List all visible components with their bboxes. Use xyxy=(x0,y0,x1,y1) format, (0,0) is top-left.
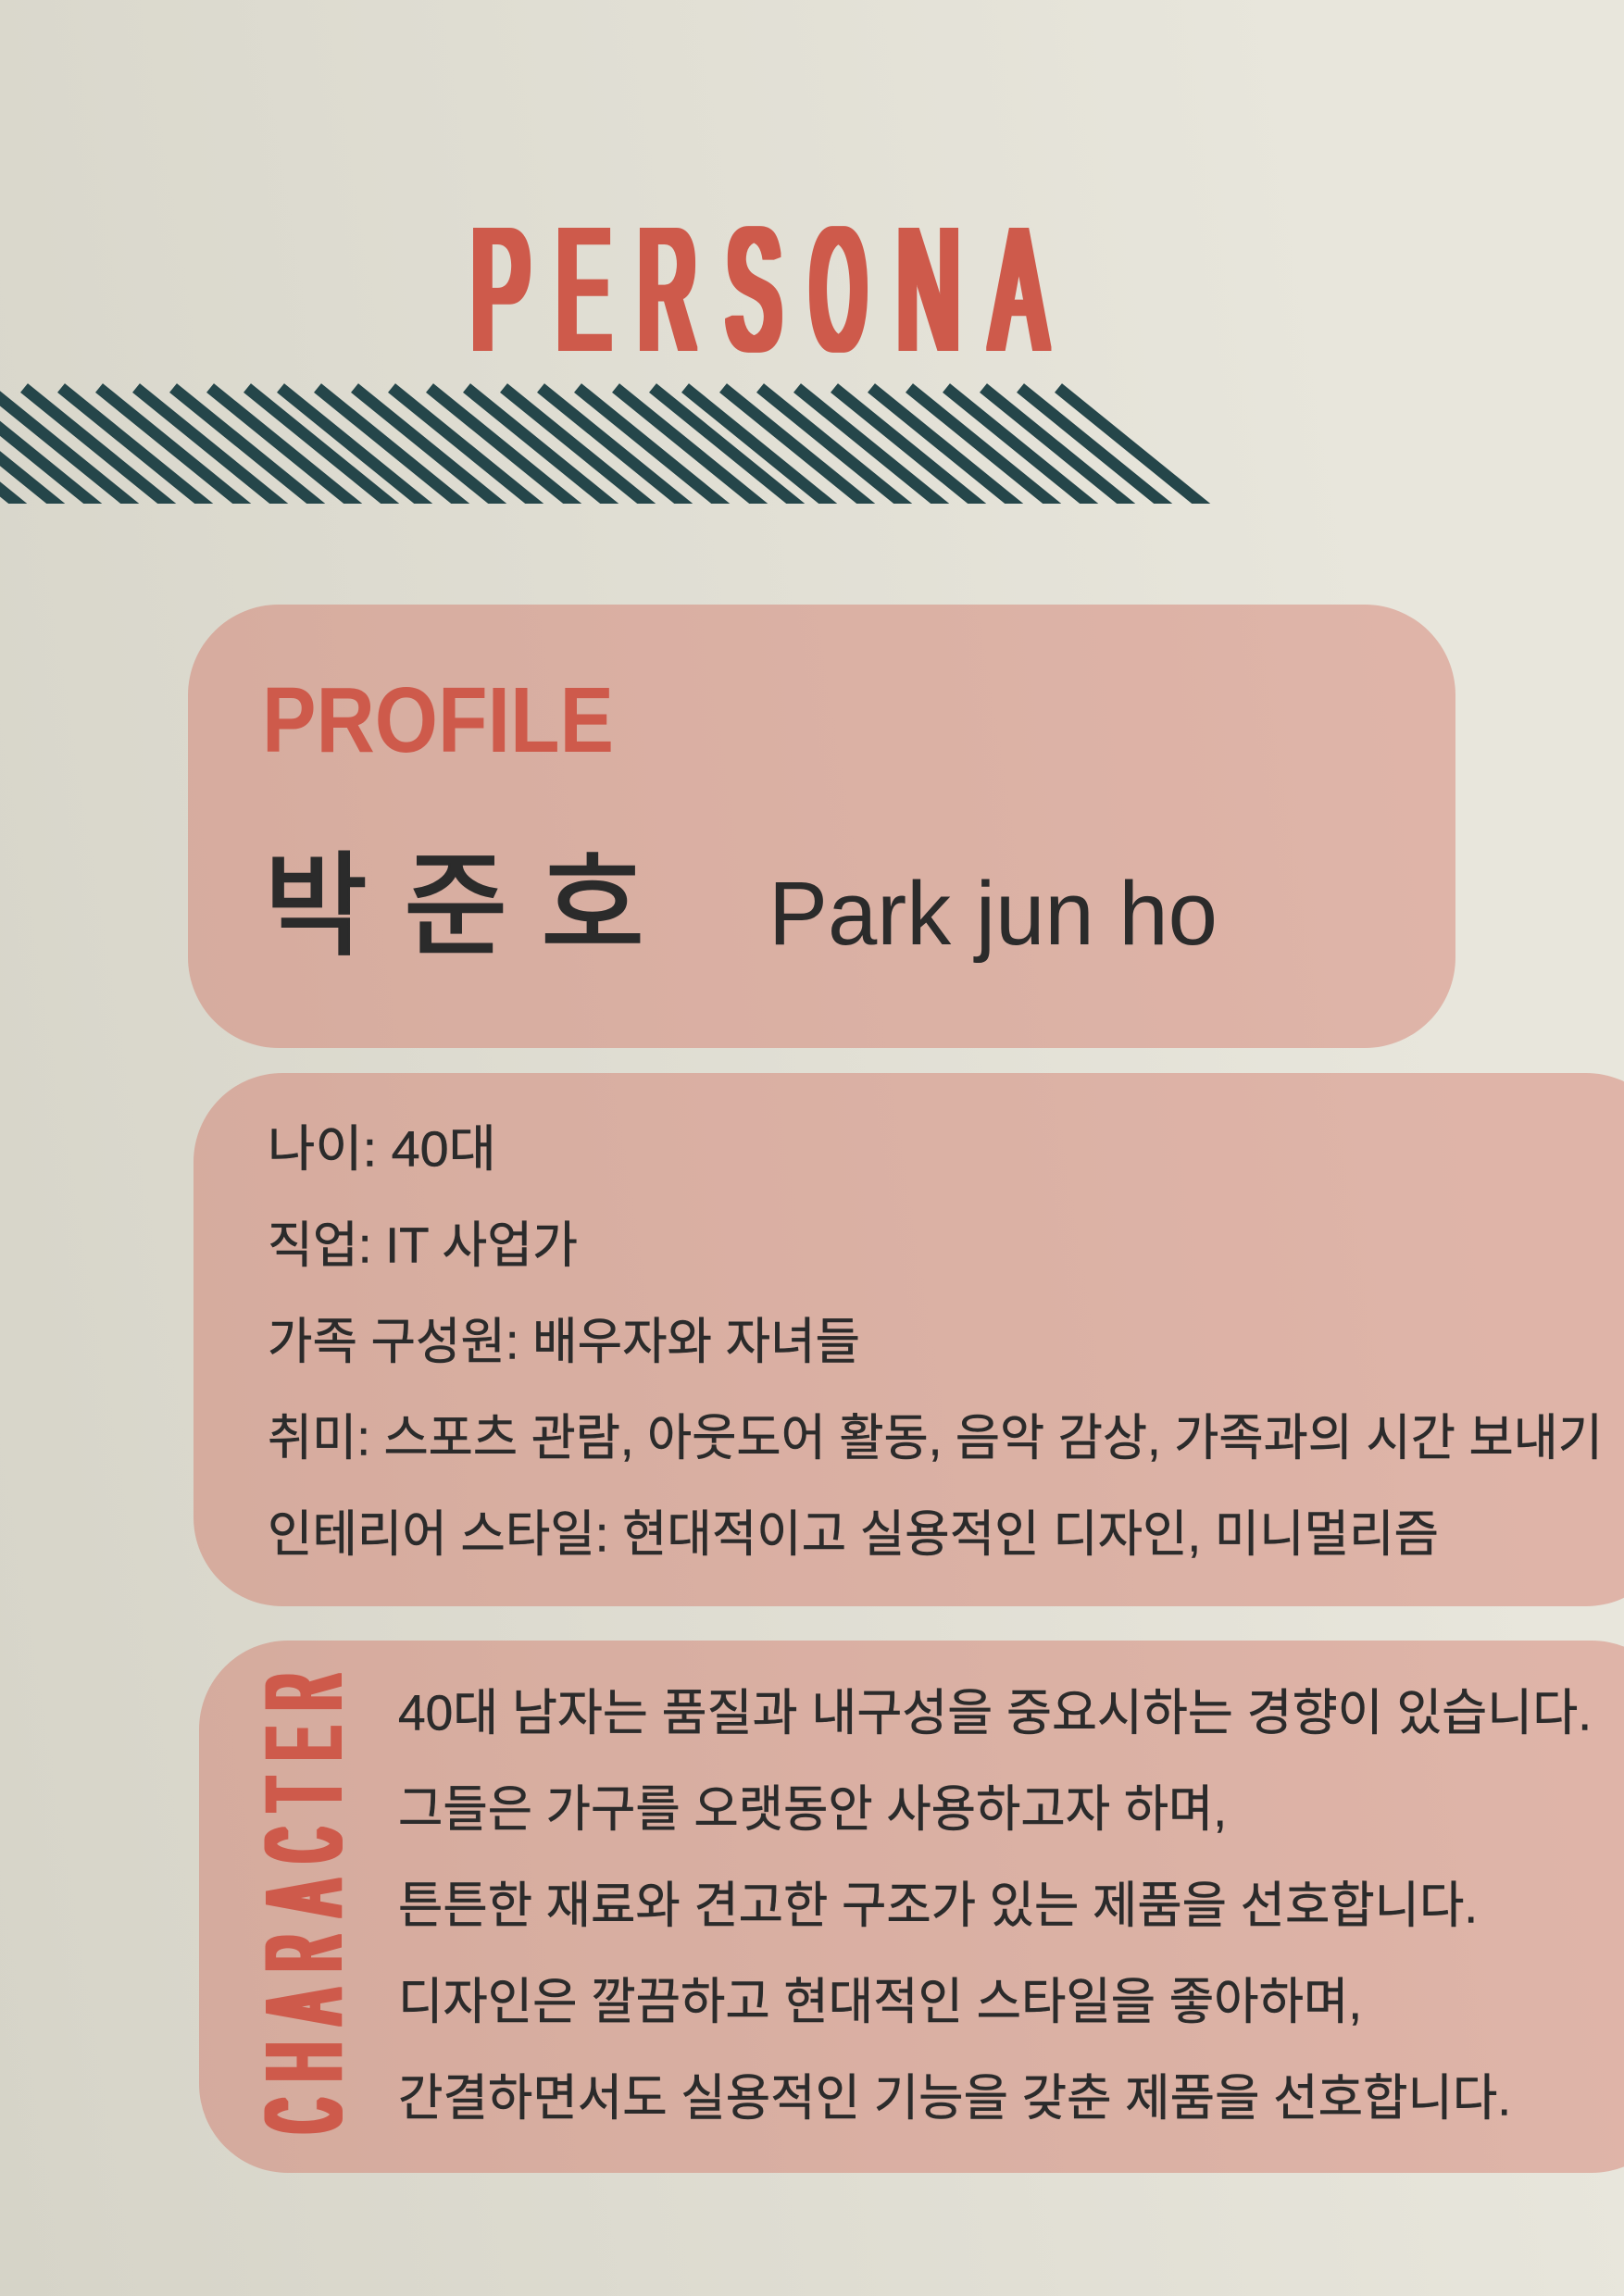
title xyxy=(471,192,1046,386)
title: N xyxy=(897,192,960,386)
panel: personal details xyxy=(194,1073,1624,1606)
character text line 4: 디자인은 깔끔하고 현대적인 스타일을 좋아하며, xyxy=(398,1974,1362,2029)
vertical heading: CHARACTER: A xyxy=(244,1881,363,1915)
vertical heading: CHARACTER: A xyxy=(244,1990,363,2022)
character text line 2: 그들은 가구를 오랫동안 사용하고자 하며, xyxy=(398,1781,1227,1837)
detail: hobbies: 취미: 스포츠 관람, 아웃도어 활동, 음악 감상, 가족과의 시간 보내기 xyxy=(268,1411,1603,1466)
heading: PROFILE: PROFILE xyxy=(262,668,614,772)
panel: character: R xyxy=(244,1675,363,1709)
vertical heading: CHARACTER: R xyxy=(244,1936,363,1970)
title: O xyxy=(811,192,866,386)
detail: interior style: 인테리어 스타일: 현대적이고 실용적인 디자인, 미니멀리즘 xyxy=(268,1507,1439,1563)
diagonal stripe band xyxy=(0,388,1219,518)
character text line 3: 튼튼한 재료와 견고한 구조가 있는 제품을 선호합니다. xyxy=(398,1878,1478,1933)
title: R xyxy=(639,192,695,386)
panel: profile xyxy=(0,605,1455,1048)
title: S xyxy=(727,192,781,386)
text: A xyxy=(992,192,1046,386)
vertical heading: CHARACTER: C xyxy=(244,2100,363,2131)
detail: family: 가족 구성원: 배우자와 자녀들 xyxy=(268,1315,860,1370)
panel: character xyxy=(199,1641,1624,2173)
character text line 1: 40대 남자는 품질과 내구성을 중요시하는 경향이 있습니다. xyxy=(398,1685,1592,1741)
vertical heading: CHARACTER: C xyxy=(244,1829,363,1861)
title: E xyxy=(557,192,609,386)
name in Latin: Park jun ho xyxy=(768,863,1218,964)
vertical heading: CHARACTER: T xyxy=(244,1778,363,1810)
vertical heading: CHARACTER xyxy=(244,1675,363,2131)
character text line 5: 간결하면서도 실용적인 기능을 갖춘 제품을 선호합니다. xyxy=(398,2070,1511,2126)
detail: age: 나이: 40대 xyxy=(268,1122,496,1178)
name in Korean: 박 준 호 xyxy=(0,843,644,969)
vertical heading: CHARACTER: H xyxy=(244,2043,363,2080)
title: P xyxy=(471,192,530,386)
vertical heading: CHARACTER: E xyxy=(244,1728,363,1759)
detail: occupation: 직업: IT 사업가 xyxy=(268,1218,578,1274)
